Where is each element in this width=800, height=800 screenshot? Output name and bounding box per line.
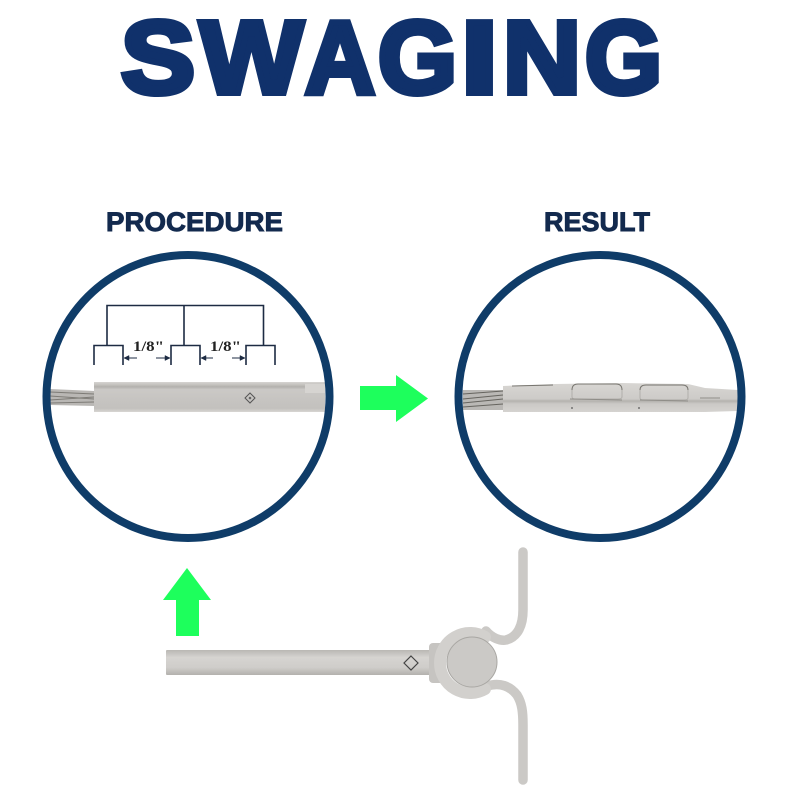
measurement brackets (94, 306, 275, 365)
heading: result: RESULT (544, 207, 651, 237)
ring (440, 633, 485, 693)
panel: procedure circle (46, 255, 330, 538)
cable (463, 390, 504, 410)
rod (166, 650, 432, 675)
title (121, 0, 662, 115)
measurement label: 1/8" (133, 339, 164, 355)
swage fitting (94, 382, 325, 412)
title: G (585, 0, 662, 115)
circle outline (46, 255, 330, 538)
title: A (305, 0, 375, 115)
title: W (200, 0, 304, 115)
arrow: up (163, 568, 211, 636)
arrow: procedure to result (360, 375, 428, 422)
crimped fitting (503, 383, 738, 412)
collar (429, 643, 445, 683)
title: I (461, 0, 498, 115)
circle outline (458, 255, 742, 538)
lower arm (487, 684, 523, 780)
title: S (121, 0, 195, 115)
icon: maker mark (245, 393, 255, 403)
icon: maker mark (404, 656, 418, 670)
title: N (503, 0, 581, 115)
disc (447, 637, 497, 687)
cable (50, 389, 95, 406)
measurement label: 1/8" (210, 339, 241, 355)
fitting photo (166, 552, 523, 780)
title: G (378, 0, 457, 115)
upper arm (486, 552, 523, 640)
heading: procedure: PROCEDURE (106, 207, 283, 237)
panel: result circle (458, 255, 742, 538)
